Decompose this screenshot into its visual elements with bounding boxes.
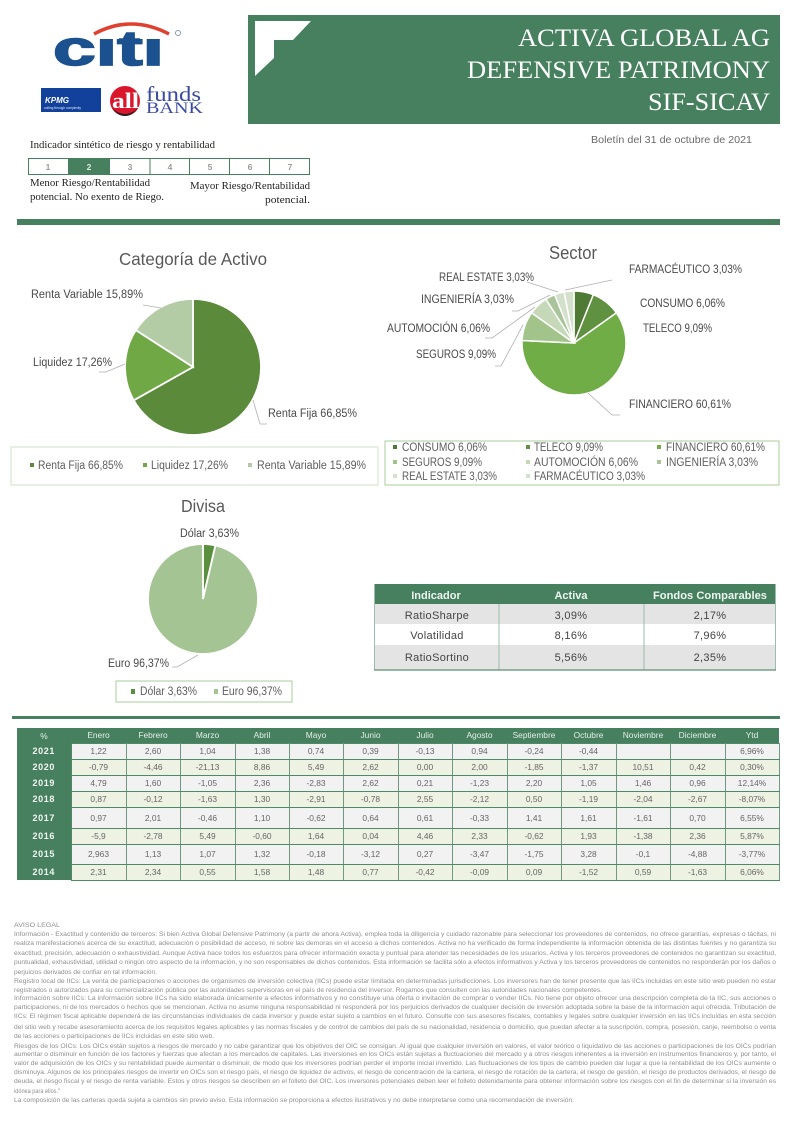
- legal notice: Riesgos de los OICs: Los OICs están sujetos a riesgos de mercado y no cabe garantizar que los objetivos del OIC se consigan. Al igual que cualquier inversión en valores, el valor teórico o liquidativo de las acciones o participaciones de los OICs podrían: [14, 1043, 776, 1050]
- data labels: INGENIERÍA 3,03%: [421, 293, 514, 306]
- chart: divisa: [108, 496, 292, 702]
- risk scale: 7: [288, 162, 293, 172]
- data labels: Renta Variable 15,89%: [31, 289, 143, 301]
- monthly returns table: -2,04: [633, 794, 653, 804]
- monthly returns table: 0,64: [362, 812, 379, 822]
- legend: Renta Fija 66,85%: [38, 460, 123, 472]
- monthly returns table: -1,63: [198, 794, 217, 804]
- monthly returns table: 2018: [33, 794, 55, 804]
- table rows: 3,09%: [555, 610, 587, 622]
- legal notice: puntualidad, exhaustividad, utilidad o ningún otro aspecto de la información, y no son responsables de dichos contenidos. Esta información se facilita sólo a efectos informativos y Activa y los terceros proveedores de contenidos no responderán por los daños o: [14, 959, 776, 966]
- legal notice: de las acciones o participaciones de IICs incluidas en este sitio web.: [14, 1033, 214, 1040]
- table header: [411, 590, 767, 602]
- monthly returns table: 0,77: [362, 867, 379, 877]
- data labels: [387, 263, 742, 411]
- monthly returns table: 1,60: [145, 778, 161, 788]
- monthly returns table: 2017: [33, 812, 55, 822]
- risk scale: 1: [46, 162, 51, 172]
- legal notice: registrados o autorizados para su comercialización pública por las autoridades supervisoras en el país de residencia del inversor. Rogamos que consulten con las autoridades nacionales competentes.: [14, 987, 602, 994]
- monthly returns table: 0,09: [526, 867, 542, 877]
- legal notice: realiza manifestaciones acerca de su exactitud, adecuación o posibilidad de acceso, ni sobre las demoras en el acceso a dichos contenidos. Activa no ha verificado de forma independiente la información obtenida de las distintas fuentes y no garantiza su: [14, 940, 776, 947]
- monthly returns table: -1,38: [633, 831, 653, 841]
- monthly returns table: -0,62: [524, 831, 544, 841]
- monthly returns table: -1,37: [579, 762, 598, 772]
- monthly returns table: Diciembre: [679, 730, 716, 740]
- monthly returns table: -1,61: [633, 812, 653, 822]
- monthly returns table: 2,60: [145, 746, 161, 756]
- risk scale: 5: [208, 162, 213, 172]
- monthly returns table: 1,41: [526, 812, 542, 822]
- monthly returns table: 1,38: [254, 746, 270, 756]
- legend: [11, 447, 378, 485]
- monthly returns table: [17, 728, 780, 881]
- logo: citi: citi: [53, 22, 164, 76]
- risk high label: potencial.: [265, 195, 310, 206]
- data labels: SEGUROS 9,09%: [416, 349, 496, 361]
- monthly returns table: 0,87: [90, 794, 107, 804]
- monthly returns table: 1,07: [199, 849, 216, 859]
- monthly returns table: -1,75: [524, 849, 544, 859]
- risk low label: Menor Riesgo/Rentabilidad: [30, 178, 151, 189]
- monthly returns table: 0,61: [417, 812, 433, 822]
- legend: SEGUROS 9,09%: [402, 457, 482, 469]
- monthly returns table: 2,33: [471, 831, 488, 841]
- monthly returns table: Abril: [254, 730, 270, 740]
- risk scale: 3: [128, 162, 133, 172]
- monthly returns table: 5,49: [308, 762, 324, 772]
- table rows: 2,17%: [694, 610, 726, 622]
- chart title: Divisa: [181, 496, 225, 516]
- monthly returns table: -0,09: [470, 867, 489, 877]
- legal notice: perjuicios derivados de confiar en tal información.: [14, 969, 157, 976]
- data labels: TELECO 9,09%: [643, 323, 712, 335]
- data labels: [108, 528, 239, 670]
- monthly returns table: Agosto: [466, 730, 493, 740]
- legend: [385, 441, 779, 485]
- monthly returns table: -2,67: [688, 794, 707, 804]
- logo: allfunds bank: [110, 82, 204, 117]
- legend: TELECO 9,09%: [534, 442, 603, 454]
- monthly returns table: 2020: [33, 762, 55, 772]
- legend: Euro 96,37%: [222, 686, 282, 698]
- risk scale: 6: [248, 162, 253, 172]
- legend: Dólar 3,63%: [140, 686, 197, 698]
- monthly returns table: 2014: [33, 867, 55, 877]
- risk high label: [190, 181, 311, 206]
- legal notice: La composición de las carteras queda sujeta a cambios sin previo aviso. Esta información se proporciona a efectos ilustrativos y no debe interpretarse como una recomendación de inversión.: [14, 1097, 574, 1104]
- monthly returns table: 2,34: [145, 867, 161, 877]
- chart title: Categoría de Activo: [119, 249, 267, 269]
- logo: allfunds bank: funds: [146, 82, 201, 106]
- data labels: [31, 289, 357, 420]
- table rows: 5,56%: [555, 652, 587, 664]
- monthly returns table: Marzo: [196, 730, 219, 740]
- risk scale: 4: [168, 162, 173, 172]
- monthly returns table: 2021: [33, 746, 55, 756]
- data labels: Dólar 3,63%: [180, 528, 239, 540]
- monthly returns table: -0,62: [306, 812, 326, 822]
- table rows: 7,96%: [694, 630, 726, 642]
- table rows: RatioSharpe: [405, 610, 469, 622]
- chart: categoría de activo: [11, 249, 378, 485]
- monthly returns table: Julio: [416, 730, 434, 740]
- monthly returns table: 0,50: [526, 794, 542, 804]
- monthly returns table: 2015: [33, 849, 55, 859]
- monthly returns table: 2016: [33, 831, 55, 841]
- legend: FARMACÉUTICO 3,03%: [534, 470, 645, 483]
- monthly returns table: 5,87%: [740, 831, 764, 841]
- header banner: [248, 15, 780, 124]
- legend: AUTOMOCIÓN 6,06%: [534, 456, 638, 469]
- monthly returns table: 2,01: [145, 812, 161, 822]
- legend: REAL ESTATE 3,03%: [402, 471, 497, 483]
- monthly returns table: 1,58: [254, 867, 270, 877]
- monthly returns table: 1,10: [254, 812, 270, 822]
- monthly returns table: -1,23: [470, 778, 489, 788]
- risk low label: potencial. No exento de Riego.: [30, 192, 164, 203]
- data labels: Euro 96,37%: [108, 658, 169, 670]
- monthly returns table: Septiembre: [513, 730, 555, 740]
- legend: [116, 681, 292, 702]
- monthly returns table: %: [40, 730, 48, 740]
- monthly returns table: 0,04: [362, 831, 379, 841]
- data labels: CONSUMO 6,06%: [640, 298, 725, 310]
- legend: Liquidez 17,26%: [151, 460, 228, 472]
- header banner: ACTIVA GLOBAL AG: [518, 25, 770, 52]
- risk indicator: [28, 140, 311, 206]
- monthly returns table: 2,31: [90, 867, 107, 877]
- monthly returns table: 1,48: [308, 867, 324, 877]
- monthly returns table: Febrero: [138, 730, 168, 740]
- monthly returns table: Ytd: [746, 730, 758, 740]
- monthly returns table: 0,97: [90, 812, 107, 822]
- logo: citi: [53, 22, 180, 76]
- monthly returns table: 2,36: [254, 778, 270, 788]
- monthly returns table: -5,9: [91, 831, 106, 841]
- legal notice: deuda, el riesgo fiscal y el riesgo de renta variable. Estos y otros riesgos se describen en el folleto del OIC. Los inversores potenciales deben leer el folleto detenidamente para obtener información sobre los riesgos con el fin de determinar si la inversión es: [14, 1078, 776, 1085]
- metrics table: [374, 584, 776, 670]
- legend: CONSUMO 6,06%: [402, 442, 487, 454]
- risk heading: Indicador sintético de riesgo y rentabilidad: [30, 140, 216, 151]
- monthly returns table: 1,22: [90, 746, 107, 756]
- logo: allfunds bank: BANK: [146, 100, 204, 117]
- risk high label: Mayor Riesgo/Rentabilidad: [190, 181, 311, 192]
- monthly returns table: 1,04: [199, 746, 216, 756]
- green divider: [12, 716, 780, 719]
- monthly returns table: 1,30: [254, 794, 270, 804]
- monthly returns table: 0,42: [689, 762, 706, 772]
- logo: allfunds bank: all: [112, 88, 139, 113]
- monthly returns table: 2,62: [362, 762, 379, 772]
- monthly returns table: 6,55%: [740, 812, 764, 822]
- monthly returns table: 0,30%: [740, 762, 764, 772]
- legend: INGENIERÍA 3,03%: [666, 456, 758, 469]
- monthly returns table: -3,47: [470, 849, 489, 859]
- bulletin date: Boletín del 31 de octubre de 2021: [591, 134, 752, 146]
- logo: KPMG: [41, 88, 101, 112]
- chart: sector: [385, 243, 779, 485]
- monthly returns table: Noviembre: [623, 730, 663, 740]
- data labels: Renta Fija 66,85%: [268, 408, 357, 420]
- monthly returns table: 0,00: [417, 762, 433, 772]
- monthly returns table: -0,18: [306, 849, 326, 859]
- monthly returns table: -0,44: [579, 746, 598, 756]
- monthly returns table: 0,27: [417, 849, 433, 859]
- monthly returns table: 0,74: [308, 746, 324, 756]
- data labels: AUTOMOCIÓN 6,06%: [387, 322, 490, 335]
- monthly returns table: 2,20: [526, 778, 542, 788]
- monthly returns table: 1,46: [635, 778, 651, 788]
- table header: Fondos Comparables: [653, 590, 767, 602]
- monthly returns table: 2,36: [689, 831, 706, 841]
- header banner: DEFENSIVE PATRIMONY: [467, 57, 770, 84]
- monthly returns table: -0,24: [524, 746, 544, 756]
- legal notice: Información sobre IICs: La información sobre IICs ha sido elaborada únicamente a efectos informativos y no constituye una oferta o invitación de comprar o vender IICs. No tiene por objeto ofrecer una descripción completa de la IIC, sus acciones o: [14, 995, 776, 1002]
- monthly returns table: -0,12: [143, 794, 163, 804]
- monthly returns table: 8,86: [254, 762, 270, 772]
- monthly returns table: -3,77%: [739, 849, 765, 859]
- monthly returns table: -1,85: [524, 762, 544, 772]
- table header: Indicador: [411, 590, 461, 602]
- monthly returns table: 2,963: [88, 849, 109, 859]
- monthly returns table: -0,13: [415, 746, 435, 756]
- monthly returns table: 3,28: [580, 849, 597, 859]
- pie: [522, 291, 626, 395]
- legal notice: idónea para ellos.": [14, 1088, 60, 1095]
- monthly returns table: -2,91: [306, 794, 326, 804]
- monthly returns table: 10,51: [633, 762, 653, 772]
- monthly returns table: 0,55: [199, 867, 216, 877]
- monthly returns table: Octubre: [574, 730, 603, 740]
- monthly returns table: 1,13: [145, 849, 161, 859]
- monthly returns table: 0,94: [471, 746, 488, 756]
- monthly returns table: -3,12: [361, 849, 380, 859]
- monthly returns table: 1,05: [580, 778, 597, 788]
- logo: KPMG: cutting through complexity: [44, 106, 81, 110]
- monthly returns table: Enero: [87, 730, 110, 740]
- monthly returns table: -0,42: [415, 867, 435, 877]
- legal notice: exactitud, precisión, adecuación o exhaustividad. Aunque Activa hace todos los esfuerzos para ofrecer información exacta y puntual para atender las necesidades de los usuarios, Activa y los terceros proveedores de contenidos no garantizan su exactitud,: [14, 950, 776, 957]
- legal notice: valor de adquisición de los OICs y su rentabilidad puede aumentar o disminuir, de modo que los inversores podrían perder el importe inicial invertido. Las fluctuaciones de los tipos de cambio pueden dar lugar a que la rentabilidad de los OICs aumente o: [14, 1060, 776, 1067]
- legal notice: participaciones, ni de los mercados o hechos que se mencionan. Activa no asume ninguna responsabilidad ni responderá por los perjuicios derivados de cualquier decisión de inversión adoptada sobre la base de la información aquí ofrecida. Tributación de: [14, 1004, 776, 1011]
- monthly returns table: Mayo: [306, 730, 326, 740]
- risk scale: [28, 158, 310, 175]
- monthly returns table: Junio: [360, 730, 381, 740]
- risk scale: 2: [87, 162, 92, 172]
- monthly returns table: -0,46: [198, 812, 217, 822]
- monthly returns table: -1,19: [579, 794, 598, 804]
- monthly returns table: 2,62: [362, 778, 379, 788]
- legend: FINANCIERO 60,61%: [666, 442, 765, 454]
- monthly returns table: -2,83: [306, 778, 326, 788]
- monthly returns table: -2,12: [470, 794, 489, 804]
- monthly returns table: 4,79: [90, 778, 107, 788]
- monthly returns table: 2,00: [471, 762, 488, 772]
- monthly returns table: -0,78: [361, 794, 380, 804]
- monthly returns table: 0,21: [417, 778, 433, 788]
- table rows: Volatilidad: [410, 630, 464, 642]
- chart title: Sector: [549, 243, 597, 263]
- monthly returns table: -0,79: [89, 762, 108, 772]
- monthly returns table: 1,93: [580, 831, 597, 841]
- legal notice: AVISO LEGAL: [14, 922, 60, 929]
- legal notice: [14, 922, 777, 1104]
- legal notice: IICs: El régimen fiscal aplicable dependerá de las circunstancias individuales de cada inversor y puede estar sujeto a cambios en el futuro. Consulte con sus asesores fiscales, contables y legales sobre cualquier inversión en las IICs incluidas en esta sección: [14, 1013, 776, 1020]
- monthly returns table: -1,05: [198, 778, 217, 788]
- monthly returns table: -4,88: [688, 849, 707, 859]
- monthly returns table: 0,96: [689, 778, 706, 788]
- risk low label: [30, 178, 164, 203]
- monthly returns table: -0,60: [252, 831, 272, 841]
- data labels: FINANCIERO 60,61%: [629, 399, 731, 411]
- table rows: 2,35%: [694, 652, 726, 664]
- table header: Activa: [554, 590, 588, 602]
- monthly returns table: 2019: [33, 778, 55, 788]
- legal notice: aumentar o disminuir en función de los factores y fuerzas que afectan a los mercados de capitales. Las inversiones en los OICs están sujetas a fluctuaciones del mercado y a otros riesgos inherentes a la inversión en instrumentos financieros y, por tanto, el: [14, 1051, 776, 1058]
- monthly returns table: 1,61: [580, 812, 597, 822]
- table rows: [405, 610, 726, 664]
- monthly returns table: 5,49: [199, 831, 216, 841]
- data labels: REAL ESTATE 3,03%: [439, 272, 534, 284]
- monthly returns table: 12,14%: [738, 778, 766, 788]
- monthly returns table: 6,96%: [740, 746, 764, 756]
- monthly returns table: -1,63: [688, 867, 707, 877]
- monthly returns table: 2,55: [417, 794, 433, 804]
- legend: Renta Variable 15,89%: [257, 460, 366, 472]
- logo: KPMG: KPMG: [45, 96, 69, 105]
- legal notice: disminuya. Algunos de los principales riesgos de invertir en OICs son el riesgo país, el riesgo de liquidez de activos, el riesgo de concentración de la cartera, el riesgo de rotación de la cartera, el riesgo de gestión, el riesgo de productos derivados, el riesgo de: [14, 1069, 776, 1076]
- table rows: RatioSortino: [405, 652, 469, 664]
- monthly returns table: -4,46: [143, 762, 163, 772]
- legal notice: del sitio web y recabe asesoramiento acerca de los requisitos legales aplicables y las normas fiscales y de control de cambios del país de su nacionalidad, residencia o domicilio, que puedan afectar a la suscripción, compra, posesión, canje, reembolso o venta: [14, 1024, 776, 1031]
- monthly returns table: 4,46: [417, 831, 433, 841]
- table rows: 8,16%: [555, 630, 587, 642]
- data labels: FARMACÉUTICO 3,03%: [629, 263, 742, 276]
- monthly returns table: 1,32: [254, 849, 270, 859]
- monthly returns table: -1,52: [579, 867, 598, 877]
- monthly returns table: 1,64: [308, 831, 324, 841]
- monthly returns table: -0,1: [636, 849, 650, 859]
- green divider: [17, 219, 780, 225]
- monthly returns table: 0,59: [635, 867, 651, 877]
- legal notice: Registro local de IICs: La venta de participaciones o acciones de organismos de inversión colectiva (IICs) puede estar limitada en determinadas jurisdicciones. Los inversores han de tener presente que las IICs incluidas en este sitio web pueden no estar: [14, 978, 777, 985]
- monthly returns table: -8,07%: [739, 794, 765, 804]
- monthly returns table: 6,06%: [740, 867, 764, 877]
- monthly returns table: -21,13: [196, 762, 219, 772]
- header banner: SIF-SICAV: [648, 89, 770, 116]
- pie: [148, 544, 258, 654]
- monthly returns table: -2,78: [143, 831, 163, 841]
- data labels: Liquidez 17,26%: [33, 357, 112, 369]
- pie: [125, 299, 261, 435]
- monthly returns table: 0,39: [362, 746, 379, 756]
- legal notice: Información - Exactitud y contenido de terceros: Si bien Activa Global Defensive Patrimony (a partir de ahora Activa), emplea toda la diligencia y cuidado razonable para seleccionar los proveedores de contenidos, no ofrece garantías, expresas o tácitas, ni: [14, 931, 776, 938]
- monthly returns table: -0,33: [470, 812, 489, 822]
- monthly returns table: 0,70: [689, 812, 706, 822]
